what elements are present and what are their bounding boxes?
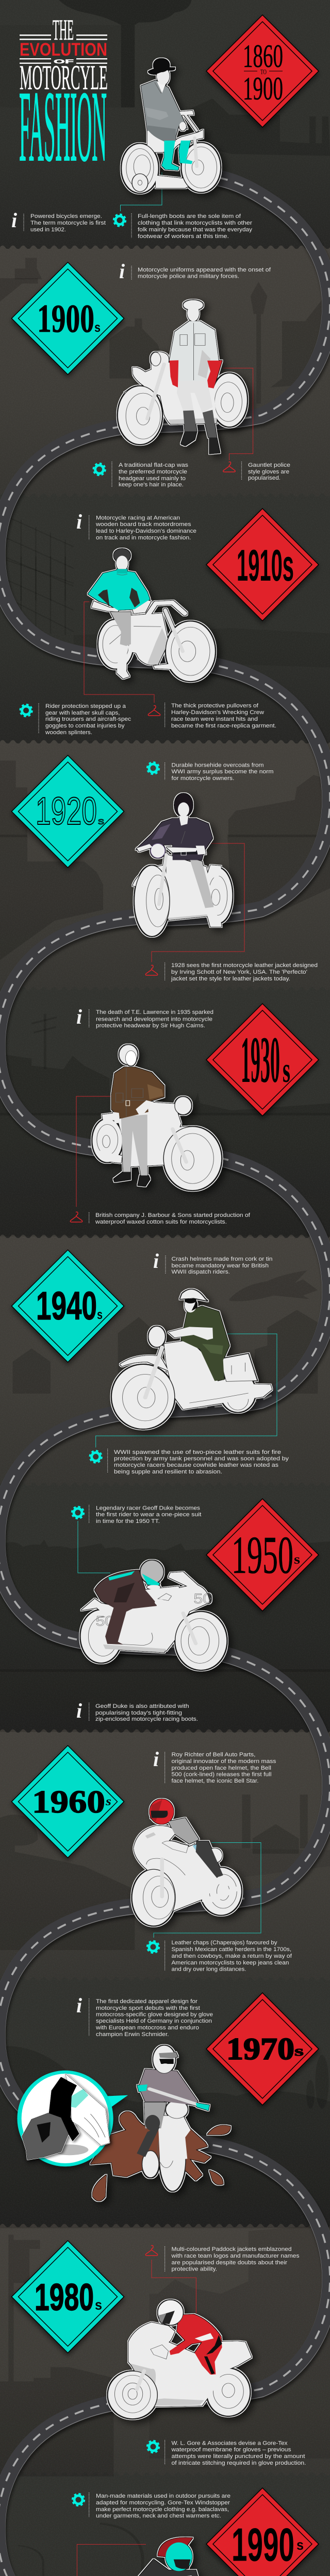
text: T.E. Lawrence: protective headwear by Sir Hugh Cairns. [96, 1023, 205, 1029]
connector lines [76, 172, 277, 2576]
rider: 1970s motocross in mud [91, 2045, 230, 2201]
text: motocross glove [76, 1994, 213, 2038]
text: gauntlet gloves: popularised. [248, 475, 280, 481]
text: paddock jackets [145, 2245, 300, 2273]
glove detail [22, 2074, 109, 2160]
diamond: 1980s [11, 2241, 124, 2353]
diamond: 1970s [206, 1993, 319, 2105]
diamond: 1940s: 1940 [36, 1284, 97, 1328]
title: THE [53, 14, 74, 46]
rider: 1980s red racing leathers [108, 2300, 252, 2419]
text: Gore-Tex gloves: attempts were literally punctured by the amount [171, 2453, 305, 2460]
text: Geoff Duke one-piece: in time for the 1950 TT. [96, 1518, 160, 1524]
text: motocross glove: with European motocross and enduro [95, 2025, 199, 2031]
text: rider protection: gear with leather skull caps, [45, 710, 120, 716]
text: full-length boots [113, 213, 253, 240]
text: racing boots: popularising today's tight-fitting [95, 1710, 182, 1716]
text: board track racing: on track and in motorcycle fashion. [96, 535, 191, 541]
text: motocross glove: i [76, 1994, 82, 2017]
text: rider protection: Rider protection stepped up a [45, 703, 126, 709]
diamond: 1960s: 1960 [32, 1785, 105, 1820]
rider: 1990s helmet mohawk [96, 2537, 211, 2576]
title word: Evolution: EVOLUTION [20, 40, 107, 60]
text: crash helmets: Crash helmets made from cork or tin [171, 1256, 272, 1262]
callout bubble: motocross glove [17, 2071, 128, 2166]
diamond: 1900s [11, 262, 124, 375]
text: man-made materials: under garments, neck and chest warmers etc. [96, 2513, 221, 2519]
text: T.E. Lawrence [76, 1005, 213, 1029]
diamond: 1920s: s [98, 816, 104, 826]
diamond: 1860 to 1900: 1900 [243, 70, 283, 107]
text: motocross glove: champion Erwin Schmider. [96, 2031, 169, 2038]
text: motorcycle uniforms [119, 260, 271, 283]
text: paddock jackets: Multi-coloured Paddock jackets emblazoned [171, 2246, 292, 2252]
text: flat-cap [93, 462, 189, 488]
diamond: 1980s: 1980 [35, 2277, 94, 2318]
text: flat-cap: keep one's hair in place. [119, 482, 184, 488]
text: board track racing: i [76, 510, 82, 533]
diamond: 1900s: 1900 [37, 296, 94, 341]
text: Gore-Tex gloves: of intricate stitching required in glove production. [171, 2460, 306, 2466]
text: crash helmets: became mandatory wear for British [171, 1263, 269, 1269]
diamond: 1970s: s [294, 2043, 304, 2059]
title word: of: OF [54, 59, 74, 65]
text: racing boots: Geoff Duke is also attributed with [95, 1703, 189, 1709]
text: horsehide overcoats [147, 762, 273, 782]
text: Roy Richter: 500 (cork-lined) releases the first full [171, 1771, 271, 1777]
text: full-length boots: Full-length boots are the sole item of [138, 213, 241, 219]
text: rider protection: goggles to combat injuries by [45, 723, 125, 729]
text: protective pullovers: race team were instant hits and [171, 716, 258, 722]
text: protective pullovers: The thick protective pullovers of [171, 703, 259, 709]
diamond: 1960s: s [105, 1795, 111, 1808]
diamond: 1990s: s [296, 2537, 304, 2553]
text: T.E. Lawrence: The death of T.E. Lawrence in 1935 sparked [96, 1009, 213, 1015]
text: racing boots: zip-enclosed motorcycle racing boots. [95, 1716, 198, 1722]
text: WWII leather suits: being supple and resilient to abrasion. [114, 1469, 222, 1475]
text: 1928 leather jacket [145, 962, 318, 982]
text: leather chaps: Leather chaps (Chaperajos) favoured by [171, 1940, 277, 1946]
text: motorcycle uniforms: Motorcycle uniforms appeared with the onset of [138, 267, 271, 273]
text: motocross glove: motorcycle sport debuts with the first [96, 2005, 200, 2011]
diamond: 1980s: s [95, 2297, 102, 2313]
text: protective pullovers: Harley-Davidson's Wrecking Crew [171, 709, 264, 716]
text: full-length boots: folk mainly because that was the everyday [138, 227, 253, 233]
diamond: 1930s [206, 1004, 319, 1116]
text: WWII leather suits: protection by army tank personnel and was soon adopted by [114, 1456, 289, 1462]
diamond: 1860 to 1900: TO [260, 69, 267, 76]
text: Geoff Duke one-piece: the first rider to wear a one-piece suit [96, 1512, 201, 1518]
text: board track racing: wooden board track motordromes [95, 521, 191, 528]
text: leather chaps [147, 1940, 292, 1972]
text: WWII leather suits: WWII spawned the use of two-piece leather suits for fire [114, 1449, 281, 1455]
rider: 1950s one-piece racing suit: 50 [194, 1591, 212, 1606]
text: Roy Richter: produced open face helmet, the Bell [171, 1765, 271, 1771]
rider: 1900s police uniform with gauntlets [118, 300, 248, 454]
text: rider protection: wooden splinters. [45, 730, 92, 736]
text: man-made materials: adapted for motorcycling. Gore-Tex Windstopper [96, 2500, 230, 2506]
text: Gore-Tex gloves [147, 2440, 306, 2466]
diamond: 1860 to 1900: 1860 [243, 38, 283, 74]
text: Gore-Tex gloves: W. L. Gore & Associates devise a Gore-Tex [171, 2440, 288, 2446]
diamond: 1910s [206, 509, 319, 621]
text: Roy Richter: original innovator of the modern mass [171, 1758, 276, 1765]
text: leather chaps: and dry over long distances. [171, 1966, 246, 1972]
text: crash helmets [153, 1249, 272, 1275]
diamond: 1940s: s [97, 1307, 103, 1322]
text: horsehide overcoats: for motorcycle owners. [171, 775, 234, 782]
text: board track racing: Motorcycle racing at American [96, 515, 180, 521]
text: man-made materials: make perfect motorcycle clothing e.g. balaclavas, [96, 2506, 229, 2513]
text: man-made materials [72, 2493, 230, 2519]
text: paddock jackets: are popularised despite doubts about their [171, 2260, 287, 2266]
diamond: 1940s [11, 1250, 124, 1362]
text: powered bicycles [11, 209, 106, 233]
mud splat [91, 2112, 230, 2201]
text: Barbour suits: waterproof waxed cotton suits for motorcyclists. [95, 1219, 227, 1225]
text: Roy Richter [153, 1748, 276, 1784]
text: gauntlet gloves: Gauntlet police [248, 462, 290, 468]
text: 1928 leather jacket: 1928 sees the first motorcycle leather jacket designed [171, 962, 318, 969]
text: paddock jackets: protective ability. [171, 2266, 217, 2273]
rider: 1910s wrecking crew pullover [88, 549, 216, 682]
text: paddock jackets: with race team logos and manufacturer names [171, 2253, 300, 2259]
text: leather chaps: Spanish Mexican cattle herders in the 1700s, [171, 1946, 291, 1953]
text: flat-cap: headgear used mainly to [119, 476, 186, 482]
diamond: 1860 to 1900 [206, 15, 319, 127]
diamond: 1990s [206, 2488, 319, 2576]
text: board track racing: lead to Harley-Davidson's dominance [96, 528, 196, 534]
diamond: 1950s [206, 1499, 319, 1611]
text: motocross glove: The first dedicated apparel design for [96, 1998, 197, 2005]
text: Barbour suits [70, 1212, 251, 1225]
diamond: 1920s [11, 755, 124, 868]
diamond: 1900s: s [94, 319, 101, 335]
text: Barbour suits: British company J. Barbour & Sons started production of [95, 1212, 251, 1218]
rider: 1860s powered bicycle with boots [122, 59, 221, 193]
text: powered bicycles: used in 1902. [30, 227, 66, 233]
text: leather chaps: and then cowboys, make a return by way of [171, 1953, 292, 1959]
text: board track racing [76, 510, 196, 541]
diamond: 1970s: 1970 [226, 2032, 294, 2066]
text: powered bicycles: Powered bicycles emerge. [30, 213, 102, 219]
rider: 1930s waxed cotton suit [92, 1045, 222, 1191]
rider: 1950s one-piece racing suit [80, 1560, 227, 1670]
text: man-made materials: Man-made materials used in outdoor pursuits are [96, 2493, 230, 2499]
text: flat-cap: A traditional flat-cap was [119, 462, 189, 468]
text: T.E. Lawrence: research and development into motorcycle [96, 1016, 212, 1022]
diamond: 1950s: s [294, 1552, 300, 1567]
diamond: 1960s [11, 1745, 124, 1858]
rider: 1960s Bell Star helmet and chaps [132, 1799, 242, 1926]
text: 1928 leather jacket: jacket set the style for leather jackets today. [171, 976, 290, 982]
rider: 1920s perfecto jacket [133, 793, 233, 936]
text: Roy Richter: face helmet, the iconic Bell Star. [171, 1778, 259, 1784]
text: flat-cap: the preferred motorcycle [119, 469, 187, 475]
text: full-length boots: footwear of workers at this time. [138, 233, 229, 240]
text: rider protection: riding trousers and aircraft-spec [45, 716, 131, 722]
text: Geoff Duke one-piece [72, 1505, 201, 1524]
text: motocross glove: specialists Held of Germany in conjunction [96, 2018, 212, 2024]
text: Gore-Tex gloves: waterproof membrane for gloves – previous [171, 2447, 291, 2453]
title [19, 14, 108, 182]
text: Geoff Duke one-piece: Legendary racer Geoff Duke becomes [96, 1505, 201, 1512]
text: T.E. Lawrence: i [76, 1005, 82, 1028]
text: motorcycle uniforms: i [119, 260, 125, 283]
text: racing boots [76, 1699, 198, 1722]
text: horsehide overcoats: Durable horsehide overcoats from [171, 762, 264, 768]
text: racing boots: i [76, 1699, 82, 1722]
text: powered bicycles: The term motorcycle is first [30, 220, 106, 226]
text: motocross glove: motocross-specific glove designed by glove [96, 2011, 213, 2018]
rider: 1940s dispatch rider [111, 1290, 272, 1429]
text: Roy Richter: i [153, 1748, 159, 1771]
rider: 1950s one-piece racing suit: 50 [96, 1614, 114, 1629]
diamond: 1920s: 1920 [36, 789, 97, 833]
text: horsehide overcoats: WWI army surplus become the norm [171, 769, 273, 775]
text: protective pullovers [148, 703, 276, 729]
text: gauntlet gloves [223, 462, 290, 481]
text: WWII leather suits: motorcycle racers because cowhide leather was noted as [114, 1462, 279, 1468]
text: motorcycle uniforms: motorcycle police and military forces. [138, 273, 239, 279]
text: powered bicycles: i [11, 209, 17, 232]
text: full-length boots: clothing that link motorcyclists with other [138, 220, 252, 226]
text: leather chaps: American motorcyclists to keep jeans clean [171, 1960, 289, 1966]
text: WWII leather suits [90, 1449, 289, 1475]
text: 1928 leather jacket: by Irving Schott of New York, USA. The 'Perfecto' [171, 969, 307, 975]
text: crash helmets: i [153, 1249, 159, 1273]
text: rider protection [20, 703, 131, 736]
text: Roy Richter: Roy Richter of Bell Auto Parts, [171, 1752, 256, 1758]
text: MOTORCYLE [20, 58, 108, 97]
text: protective pullovers: became the first race-replica garment. [171, 723, 276, 729]
text: crash helmets: WWII dispatch riders. [171, 1269, 230, 1275]
text: gauntlet gloves: style gloves are [248, 469, 289, 475]
diamond: 1930s: s [283, 1050, 290, 1090]
